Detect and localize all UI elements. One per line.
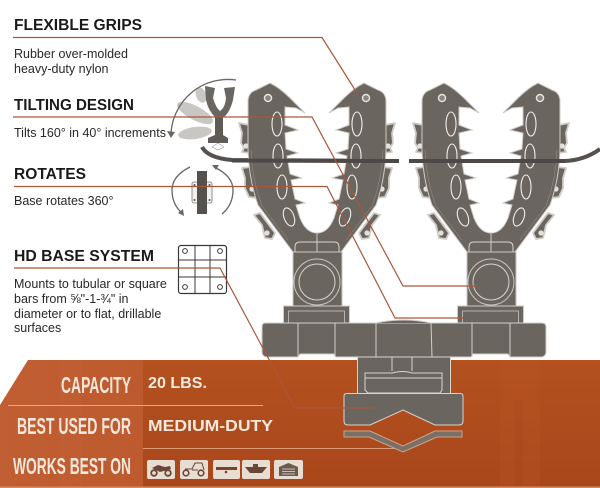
wood background band: [0, 360, 600, 488]
text: base system detail: surfaces: [14, 321, 61, 335]
crossbar over yokes: [232, 158, 565, 163]
right grip yoke and neck: [413, 83, 569, 324]
heading: tilting design: TILTING DESIGN: [14, 97, 134, 114]
value: best used for: MEDIUM-DUTY: [148, 418, 273, 435]
lower clamp: [344, 357, 463, 452]
heading: hd base system: HD BASE SYSTEM: [14, 248, 154, 265]
text: base system detail: Mounts to tubular or square: [14, 277, 167, 291]
label: works best on: WORKS BEST ON: [13, 453, 131, 479]
text: flexible grips detail: Rubber over-molded: [14, 47, 128, 61]
icon: trailer: [213, 460, 240, 479]
heading: rotates: ROTATES: [14, 166, 86, 183]
icon: atv: [147, 460, 175, 479]
icon row: vehicles: [147, 460, 303, 479]
text: flexible grips detail: heavy-duty nylon: [14, 62, 109, 76]
icon: tilt range: [167, 79, 236, 150]
value: capacity: 20 LBS.: [148, 375, 207, 392]
label: best used for: BEST USED FOR: [17, 413, 131, 439]
heading: flexible grips: FLEXIBLE GRIPS: [14, 17, 142, 34]
icon: boat: [242, 460, 270, 479]
main base bar: [262, 320, 546, 357]
text: tilting detail: Tilts 160° in 40° increments: [14, 126, 166, 140]
icon: rotate base: [172, 165, 233, 216]
icon: utv: [180, 460, 208, 479]
label: capacity: CAPACITY: [61, 372, 131, 398]
text: base system detail: bars from ⅝"-1-¾" in: [14, 292, 129, 306]
icon: hd base plate: [178, 245, 226, 294]
leader lines: [13, 38, 478, 408]
icon: garage: [274, 460, 303, 479]
crossbar: curved black bar: [202, 147, 600, 161]
text: rotates detail: Base rotates 360°: [14, 194, 114, 208]
text: base system detail: diameter or to flat, drillable: [14, 307, 161, 321]
left grip yoke and neck: [239, 83, 395, 324]
